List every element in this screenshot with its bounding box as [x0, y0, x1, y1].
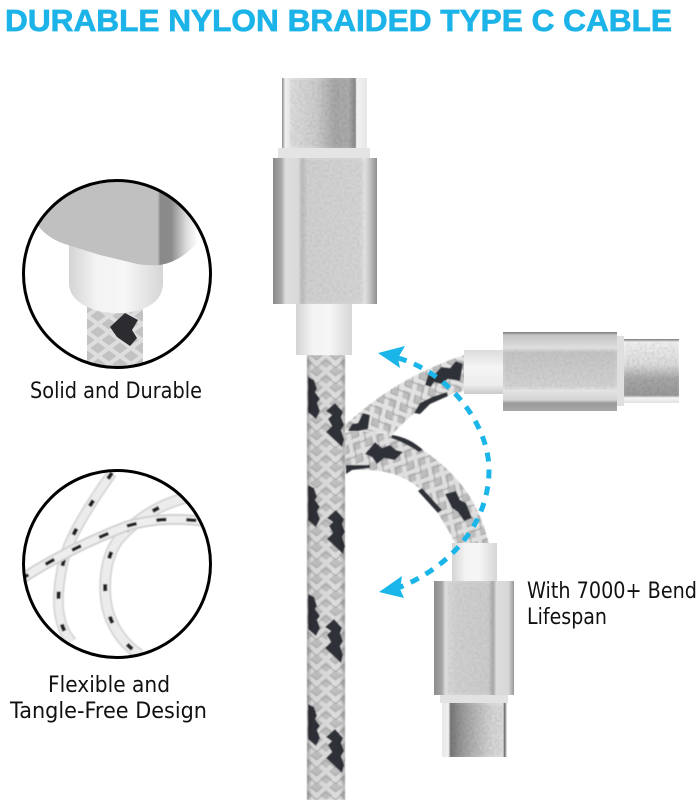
bottom connector	[434, 543, 514, 757]
panel: flexible and tangle-free zoom circle	[20, 470, 210, 658]
label: flexible and tangle-free design: Flexible and	[48, 673, 170, 698]
metal tip	[442, 703, 507, 757]
label: with 7000+ bend lifespan: Lifespan	[527, 605, 607, 630]
metal housing	[273, 158, 377, 304]
detail image: crossing cables	[20, 473, 210, 655]
circle outline	[24, 180, 210, 368]
tip grain	[626, 342, 678, 397]
collar	[440, 695, 508, 703]
metal tip	[624, 339, 679, 403]
black braid marks	[308, 377, 345, 773]
collar	[278, 148, 370, 158]
metal housing	[503, 332, 617, 411]
label: solid and durable: Solid and Durable	[30, 379, 202, 404]
panel: solid and durable zoom circle	[20, 170, 215, 370]
upper bent cable	[345, 355, 465, 436]
housing grain	[300, 160, 365, 302]
metal tip	[282, 78, 367, 148]
tip grain	[290, 80, 356, 146]
lower bent cable	[345, 431, 489, 545]
arrow: dashed bend arc	[378, 346, 489, 598]
housing grain	[505, 350, 615, 390]
strain relief	[464, 350, 504, 394]
housing grain	[448, 583, 493, 693]
metal housing	[434, 581, 514, 695]
arrowhead down	[379, 576, 404, 598]
title: DURABLE NYLON BRAIDED TYPE C CABLE	[5, 3, 672, 38]
circle outline	[24, 470, 210, 658]
top connector	[273, 78, 377, 355]
tip grain	[451, 705, 503, 755]
arrowhead up	[378, 346, 405, 368]
collar	[617, 336, 624, 406]
strain relief	[452, 543, 497, 582]
strain relief	[296, 303, 352, 355]
vertical cable	[307, 355, 345, 800]
detail image: connector joint	[38, 182, 196, 366]
label: flexible and tangle-free design: Tangle-Free Design	[9, 699, 207, 724]
right connector	[464, 332, 679, 411]
